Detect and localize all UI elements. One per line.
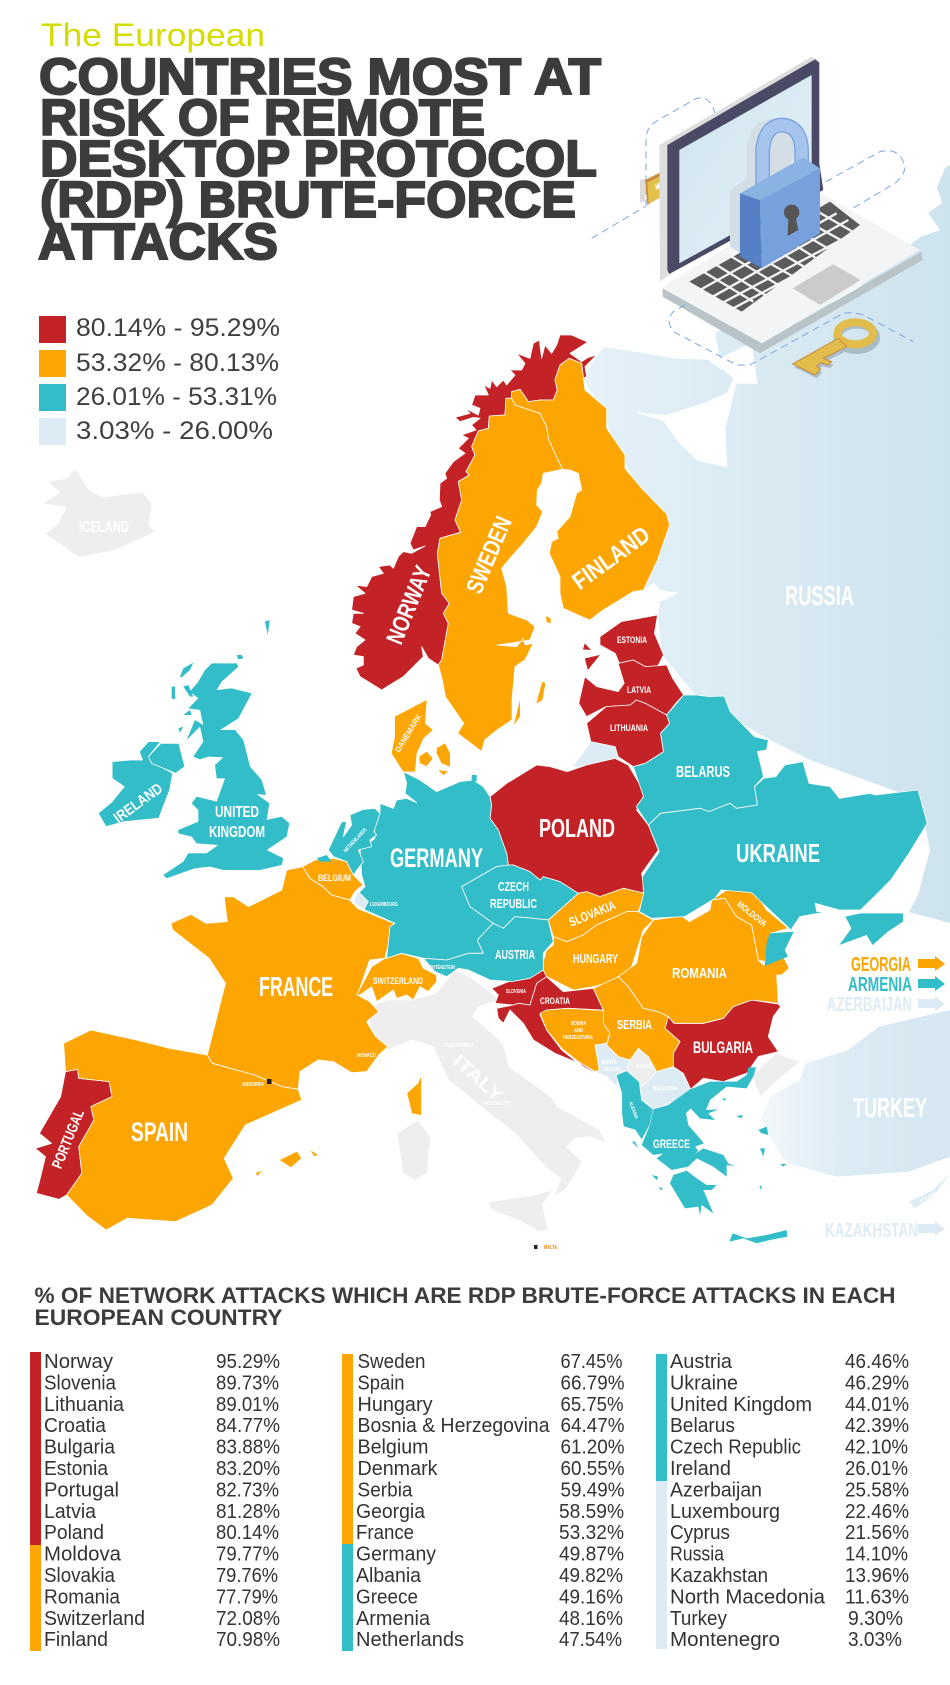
table column 1: Norway to Finland: 80.14% [216, 1522, 279, 1544]
title: main heading: DESKTOP PROTOCOL [40, 130, 597, 187]
table column 2: Sweden to Netherlands: 66.79% [560, 1372, 625, 1394]
map labels: country names: LATVIA [627, 685, 651, 695]
map background: Russia [583, 165, 950, 923]
table column 3: Austria to Montenegro: Kazakhstan [670, 1565, 768, 1587]
table heading: % OF NETWORK ATTACKS WHICH ARE RDP BRUTE-FORCE ATTACKS IN EACH [34, 1283, 896, 1308]
table column 1: Norway to Finland [30, 1351, 280, 1651]
map: Luxembourg [353, 892, 368, 910]
map labels: country names: BELARUS [676, 764, 730, 781]
table column 3: Austria to Montenegro: 9.30% [848, 1608, 903, 1630]
callout: Armenia with arrow: ARMENIA [848, 974, 912, 996]
table column 3: Austria to Montenegro: 42.39% [845, 1415, 909, 1437]
table column 3: Austria to Montenegro: 3.03% [848, 1629, 902, 1651]
map labels: country names: LIECHTENSTEIN [423, 965, 455, 971]
map labels: country names: GREECE [653, 1137, 690, 1151]
map labels: country names: CZECH [498, 879, 529, 894]
table column 2: Sweden to Netherlands: Belgium [358, 1437, 428, 1459]
legend: 53.32% - 80.13% [76, 349, 279, 377]
table heading [34, 1283, 896, 1330]
table column 1: Norway to Finland: 84.77% [216, 1415, 280, 1437]
map labels: country names: SLOVAKIA [567, 897, 618, 930]
map labels: country names: UNITED [215, 804, 259, 821]
map labels: country names: AND [574, 1028, 583, 1034]
table column 2: Sweden to Netherlands: 48.16% [559, 1608, 623, 1630]
table column 1: Norway to Finland: Norway [44, 1351, 113, 1373]
map labels: country names: KINGDOM [209, 824, 265, 841]
map labels: country names: CYPRUS [920, 1188, 945, 1205]
table column 1: Norway to Finland: 81.28% [216, 1501, 280, 1523]
table column 2: Sweden to Netherlands: Sweden [358, 1351, 426, 1373]
table column 2: Sweden to Netherlands: Hungary [358, 1394, 432, 1416]
table column 3: Austria to Montenegro: Montenegro [670, 1629, 780, 1651]
map labels: country names: DANEMARK [393, 712, 424, 754]
table column 2: Sweden to Netherlands: 47.54% [559, 1629, 622, 1651]
table column 3: Austria to Montenegro [656, 1351, 909, 1651]
map labels: country names: FRANCE [259, 971, 333, 1002]
table column 1: Norway to Finland: Poland [44, 1522, 104, 1544]
table column 2: Sweden to Netherlands: 65.75% [560, 1394, 624, 1416]
map labels: country names: BOSNIA [571, 1021, 586, 1027]
table column 3: Austria to Montenegro: United Kingdom [670, 1394, 812, 1416]
table column 3: Austria to Montenegro: North Macedonia [670, 1586, 826, 1608]
table column 2: Sweden to Netherlands: 53.32% [559, 1522, 624, 1544]
map labels: country names: IRELAND [111, 780, 166, 827]
map: no-data countries in grey [44, 469, 800, 1232]
table column 3: Austria to Montenegro: Cyprus [670, 1522, 730, 1544]
table column 3: Austria to Montenegro: 26.01% [845, 1458, 908, 1480]
map: medium-risk countries in teal [98, 620, 930, 1243]
map labels: country names: ICELAND [79, 519, 129, 536]
map labels: country names: SLOVENIA [506, 989, 526, 995]
table column 2: Sweden to Netherlands: Bosnia & Herzegovina [358, 1415, 550, 1437]
table column 3: Austria to Montenegro: Belarus [670, 1415, 735, 1437]
title: eyebrow: The European [41, 17, 265, 53]
map labels: country names: VATICAN CITY [483, 1101, 512, 1107]
table column 3: Austria to Montenegro: Ukraine [670, 1372, 738, 1394]
table column 2: Sweden to Netherlands: 58.59% [559, 1501, 624, 1523]
table column 2: Sweden to Netherlands: Armenia [356, 1608, 431, 1630]
table column 1: Norway to Finland: Slovenia [44, 1372, 117, 1394]
table column 3: Austria to Montenegro: 14.10% [845, 1544, 908, 1566]
table column 1: Norway to Finland: 79.76% [216, 1565, 278, 1587]
table column 1: Norway to Finland: Romania [44, 1586, 121, 1608]
map: low-risk countries [573, 742, 950, 1208]
table column 2: Sweden to Netherlands: France [356, 1522, 414, 1544]
table column 3: Austria to Montenegro: Russia [670, 1544, 725, 1566]
map labels: country names: BULGARIA [693, 1038, 753, 1057]
table column 1: Norway to Finland: Switzerland [44, 1608, 145, 1630]
table column 1: Norway to Finland: Bulgaria [44, 1437, 116, 1459]
map labels: country names [49, 513, 945, 1251]
table column 1: Norway to Finland: Latvia [44, 1501, 97, 1523]
table column 3: Austria to Montenegro: Ireland [670, 1458, 731, 1480]
map labels: country names: NEGRO [603, 1067, 621, 1073]
map labels: country names: ESTONIA [617, 635, 647, 645]
table column 2: Sweden to Netherlands: 49.82% [559, 1565, 623, 1587]
table column 3: Austria to Montenegro: Austria [670, 1351, 733, 1373]
table column 1: Norway to Finland: 82.73% [216, 1479, 279, 1501]
map labels: country names: MACEDONIA [653, 1086, 678, 1092]
map labels: country names: KOSOVO [636, 1064, 652, 1070]
map labels: country names: CROATIA [540, 996, 570, 1006]
map labels: country names: SWEDEN [461, 513, 518, 598]
table column 1: Norway to Finland: 77.79% [216, 1586, 278, 1608]
map labels: country names: MONTE- [602, 1060, 618, 1066]
table column 1: Norway to Finland: Croatia [44, 1415, 107, 1437]
table column 2: Sweden to Netherlands: Serbia [358, 1479, 413, 1501]
table column 1: Norway to Finland: Estonia [44, 1458, 109, 1480]
table column 1: Norway to Finland: 79.77% [216, 1544, 279, 1566]
map labels: country names: AUSTRIA [495, 947, 535, 962]
table column 2: Sweden to Netherlands: 59.49% [560, 1479, 625, 1501]
table column 2: Sweden to Netherlands: Denmark [358, 1458, 438, 1480]
table column 2: Sweden to Netherlands: Germany [356, 1544, 436, 1566]
map labels: country names: HUNGARY [573, 951, 618, 966]
table column 3: Austria to Montenegro: Azerbaijan [670, 1479, 762, 1501]
table column 3: Austria to Montenegro: 42.10% [845, 1437, 908, 1459]
legend: 80.14% - 95.29% [76, 314, 280, 342]
title: main heading [38, 48, 601, 270]
map labels: country names: BELGIUM [318, 873, 351, 883]
table column 1: Norway to Finland: Moldova [44, 1544, 122, 1566]
legend: 26.01% - 53.31% [76, 383, 277, 411]
map labels: country names: MALTA [544, 1245, 557, 1251]
table column 1: Norway to Finland: Finland [44, 1629, 108, 1651]
map labels: country names: MONACO [357, 1053, 376, 1059]
table column 1: Norway to Finland: Portugal [44, 1479, 119, 1501]
title: main heading: COUNTRIES MOST AT [39, 48, 601, 105]
table column 1: Norway to Finland: 72.08% [216, 1608, 280, 1630]
table column 1: Norway to Finland: 89.01% [216, 1394, 279, 1416]
map labels: country names: REPUBLIC [490, 896, 537, 911]
map labels: country names: ITALY [449, 1050, 507, 1106]
table column 2: Sweden to Netherlands [342, 1351, 625, 1651]
table column 1: Norway to Finland: 89.73% [216, 1372, 279, 1394]
map labels: country names: HERZEGOVINA [563, 1035, 593, 1041]
table column 2: Sweden to Netherlands: Greece [356, 1586, 418, 1608]
table column 3: Austria to Montenegro: 46.46% [845, 1351, 909, 1373]
title: main heading: RISK OF REMOTE [40, 89, 485, 146]
map labels: country names: PORTUGAL [49, 1107, 88, 1171]
table column 2: Sweden to Netherlands: 60.55% [560, 1458, 625, 1480]
map labels: country names: SWITZERLAND [373, 976, 423, 986]
table column 2: Sweden to Netherlands: Netherlands [356, 1629, 464, 1651]
table column 2: Sweden to Netherlands: Georgia [356, 1501, 426, 1523]
map labels: country names: SERBIA [617, 1017, 652, 1032]
table column 1: Norway to Finland: 95.29% [216, 1351, 280, 1373]
map labels: country names: RUSSIA [785, 580, 854, 611]
illustration: laptop with padlock and key: * [655, 179, 663, 200]
table column 3: Austria to Montenegro: 44.01% [845, 1394, 909, 1416]
map labels: country names: UKRAINE [736, 838, 820, 868]
map: medium-high-risk countries in orange [64, 358, 789, 1230]
illustration: laptop with padlock and key [592, 57, 923, 378]
map labels: country names: POLAND [539, 813, 615, 843]
map labels: country names: GERMANY [390, 843, 483, 873]
map labels: country names: FINLAND [567, 521, 655, 595]
table column 2: Sweden to Netherlands: 67.45% [560, 1351, 623, 1373]
legend [39, 314, 280, 445]
map labels: country names: SAN MARINO [445, 1043, 473, 1049]
table column 2: Sweden to Netherlands: 49.87% [559, 1544, 624, 1566]
table column 3: Austria to Montenegro: 13.96% [845, 1565, 909, 1587]
map labels: country names: NETHERLANDS [343, 827, 369, 854]
table column 1: Norway to Finland: 83.20% [216, 1458, 280, 1480]
map labels: country names: ANDORRA [242, 1082, 264, 1088]
table column 1: Norway to Finland: 70.98% [216, 1629, 280, 1651]
map labels: country names: LITHUANIA [610, 723, 648, 733]
table column 2: Sweden to Netherlands: 64.47% [560, 1415, 625, 1437]
title: main heading: (RDP) BRUTE-FORCE [40, 171, 576, 228]
table column 3: Austria to Montenegro: Turkey [670, 1608, 727, 1630]
map labels: country names: ROMANIA [672, 965, 727, 982]
table column 2: Sweden to Netherlands: 61.20% [560, 1437, 625, 1459]
table column 3: Austria to Montenegro: 25.58% [845, 1479, 909, 1501]
table column 3: Austria to Montenegro: Luxembourg [670, 1501, 780, 1523]
table column 1: Norway to Finland: Slovakia [44, 1565, 116, 1587]
table column 3: Austria to Montenegro: 22.46% [845, 1501, 909, 1523]
table column 3: Austria to Montenegro: 21.56% [845, 1522, 909, 1544]
table column 3: Austria to Montenegro: 11.63% [845, 1586, 909, 1608]
table column 3: Austria to Montenegro: 46.29% [845, 1372, 909, 1394]
callout: Georgia with arrow: GEORGIA [851, 954, 911, 976]
table column 3: Austria to Montenegro: Czech Republic [670, 1437, 801, 1459]
title: main heading: ATTACKS [38, 213, 278, 270]
map labels: country names: MOLDOVA [735, 899, 769, 929]
table column 1: Norway to Finland: Lithuania [44, 1394, 125, 1416]
table column 1: Norway to Finland: 83.88% [216, 1437, 280, 1459]
table column 2: Sweden to Netherlands: Spain [358, 1372, 404, 1394]
legend: 3.03% - 26.00% [76, 417, 273, 445]
table heading: EUROPEAN COUNTRY [34, 1305, 283, 1330]
map labels: country names: LUXEMBOURG [370, 902, 398, 908]
table column 2: Sweden to Netherlands: 49.16% [559, 1586, 623, 1608]
map background: Turkey [761, 1010, 950, 1177]
map labels: country names: NORWAY [382, 562, 437, 648]
map labels: country names: ALBANIA [627, 1101, 639, 1120]
map: high-risk countries in red [35, 335, 781, 1199]
map labels: country names: SPAIN [131, 1117, 188, 1147]
table column 2: Sweden to Netherlands: Albania [356, 1565, 422, 1587]
